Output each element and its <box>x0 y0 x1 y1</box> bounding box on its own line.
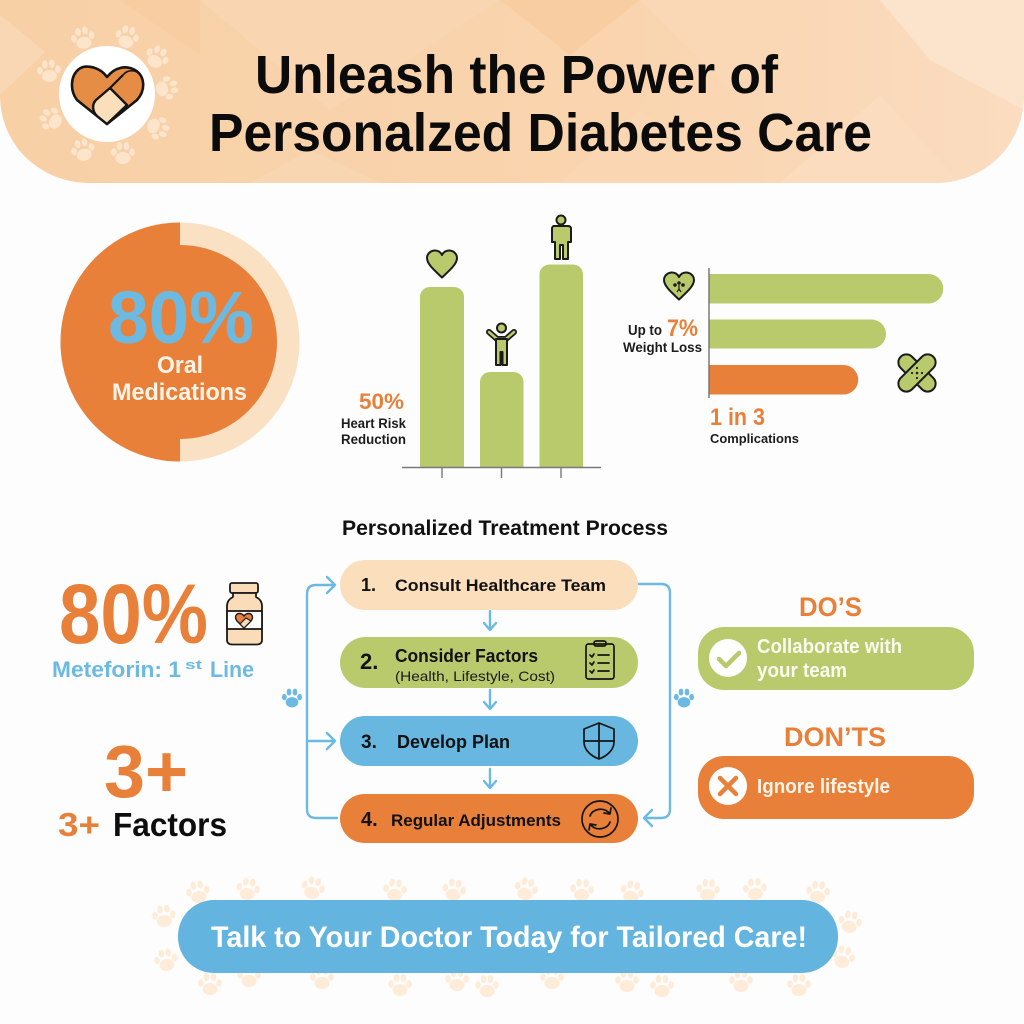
title: Personalzed Diabetes Care <box>209 103 872 163</box>
step 4 <box>340 794 638 843</box>
donut stat: 80% oral medications: Medications <box>112 379 247 406</box>
do card: your team <box>757 660 847 682</box>
icon: person arms raised <box>489 324 514 365</box>
icon: medicine bottle <box>227 583 262 644</box>
label: 1 in 3 complications: Complications <box>710 431 799 446</box>
icon: heart and pill logo <box>59 46 155 142</box>
label: metformin first line: st <box>185 657 203 672</box>
label: 1 in 3 complications <box>710 404 799 446</box>
stat: 3+ factors: 3+ <box>58 806 100 843</box>
icon: bandage <box>895 351 939 395</box>
icon: heart <box>427 250 457 278</box>
label: up to 7% weight loss: Up to <box>628 323 662 339</box>
donut stat: 80% oral medications <box>60 222 299 462</box>
bars <box>420 264 583 467</box>
icon: heart with figure <box>664 272 694 300</box>
label: 50% heart risk reduction <box>341 389 406 447</box>
step 1: 1. <box>361 575 376 595</box>
paw ring <box>36 23 180 164</box>
stat: 3+ factors: Factors <box>113 806 227 843</box>
call to action banner <box>178 900 838 973</box>
step 1 <box>340 560 638 610</box>
step 2: 2. <box>360 649 378 674</box>
icon: person standing <box>552 216 571 259</box>
step 3: 3. <box>361 732 377 753</box>
step 4: 4. <box>361 809 378 831</box>
donut stat: 80% oral medications: 80% <box>108 276 254 359</box>
icon: shield <box>584 723 614 759</box>
label: up to 7% weight loss: Weight Loss <box>623 339 702 355</box>
title: Unleash the Power of <box>255 45 779 105</box>
label: metformin first line: Meteforin: 1 <box>52 657 181 682</box>
label: 50% heart risk reduction: Heart Risk <box>341 416 406 431</box>
label: 50% heart risk reduction: 50% <box>359 389 404 414</box>
label: up to 7% weight loss <box>623 315 702 355</box>
title <box>209 45 872 163</box>
icon: paw right <box>674 689 694 707</box>
step 3 <box>340 716 638 766</box>
stat: 3+ factors: 3+ <box>104 730 188 813</box>
do card: Collaborate with <box>757 636 902 658</box>
step 3: Develop Plan <box>397 732 510 752</box>
stat: 80% metformin: 80% <box>59 567 208 661</box>
arrow: step 1 to 2 <box>484 611 496 630</box>
step 4: Regular Adjustments <box>391 811 561 830</box>
step 2 <box>340 637 638 688</box>
arrow: step 2 to 3 <box>484 690 496 709</box>
step 2: (Health, Lifestyle, Cost) <box>395 668 555 684</box>
paw pattern behind call to action <box>151 874 864 997</box>
label: 50% heart risk reduction: Reduction <box>341 432 406 447</box>
step 2: Consider Factors <box>395 646 538 666</box>
label: up to 7% weight loss: 7% <box>667 315 698 342</box>
stat: 3+ factors <box>58 730 227 843</box>
step 1: Consult Healthcare Team <box>395 576 606 595</box>
heading: dos: DO’S <box>799 592 862 622</box>
horizontal bars <box>709 274 943 394</box>
dont card: Ignore lifestyle <box>757 776 890 798</box>
stat: 80% metformin <box>52 567 262 682</box>
call to action banner: Talk to Your Doctor Today for Tailored Care! <box>211 921 807 954</box>
arrow: left loop <box>307 577 337 818</box>
donut stat: 80% oral medications: Oral <box>157 352 203 379</box>
icon: refresh <box>582 801 618 837</box>
heading: donts: DON’TS <box>784 722 886 752</box>
icon: clipboard <box>586 641 614 679</box>
label: metformin first line <box>52 657 254 682</box>
label: metformin first line: Line <box>210 657 254 682</box>
do card <box>698 627 974 690</box>
arrow: step 3 to 4 <box>484 769 496 788</box>
dont card <box>698 756 974 819</box>
flow connectors <box>307 577 670 826</box>
arrow: right loop <box>639 584 670 826</box>
label: 1 in 3 complications: 1 in 3 <box>710 404 765 431</box>
icon: paw left <box>282 689 302 707</box>
header banner <box>0 0 1024 183</box>
horizontal bar chart: weight loss and complications <box>623 268 943 446</box>
heading: process: Personalized Treatment Process <box>342 517 668 540</box>
bar chart: heart risk reduction <box>341 216 601 478</box>
